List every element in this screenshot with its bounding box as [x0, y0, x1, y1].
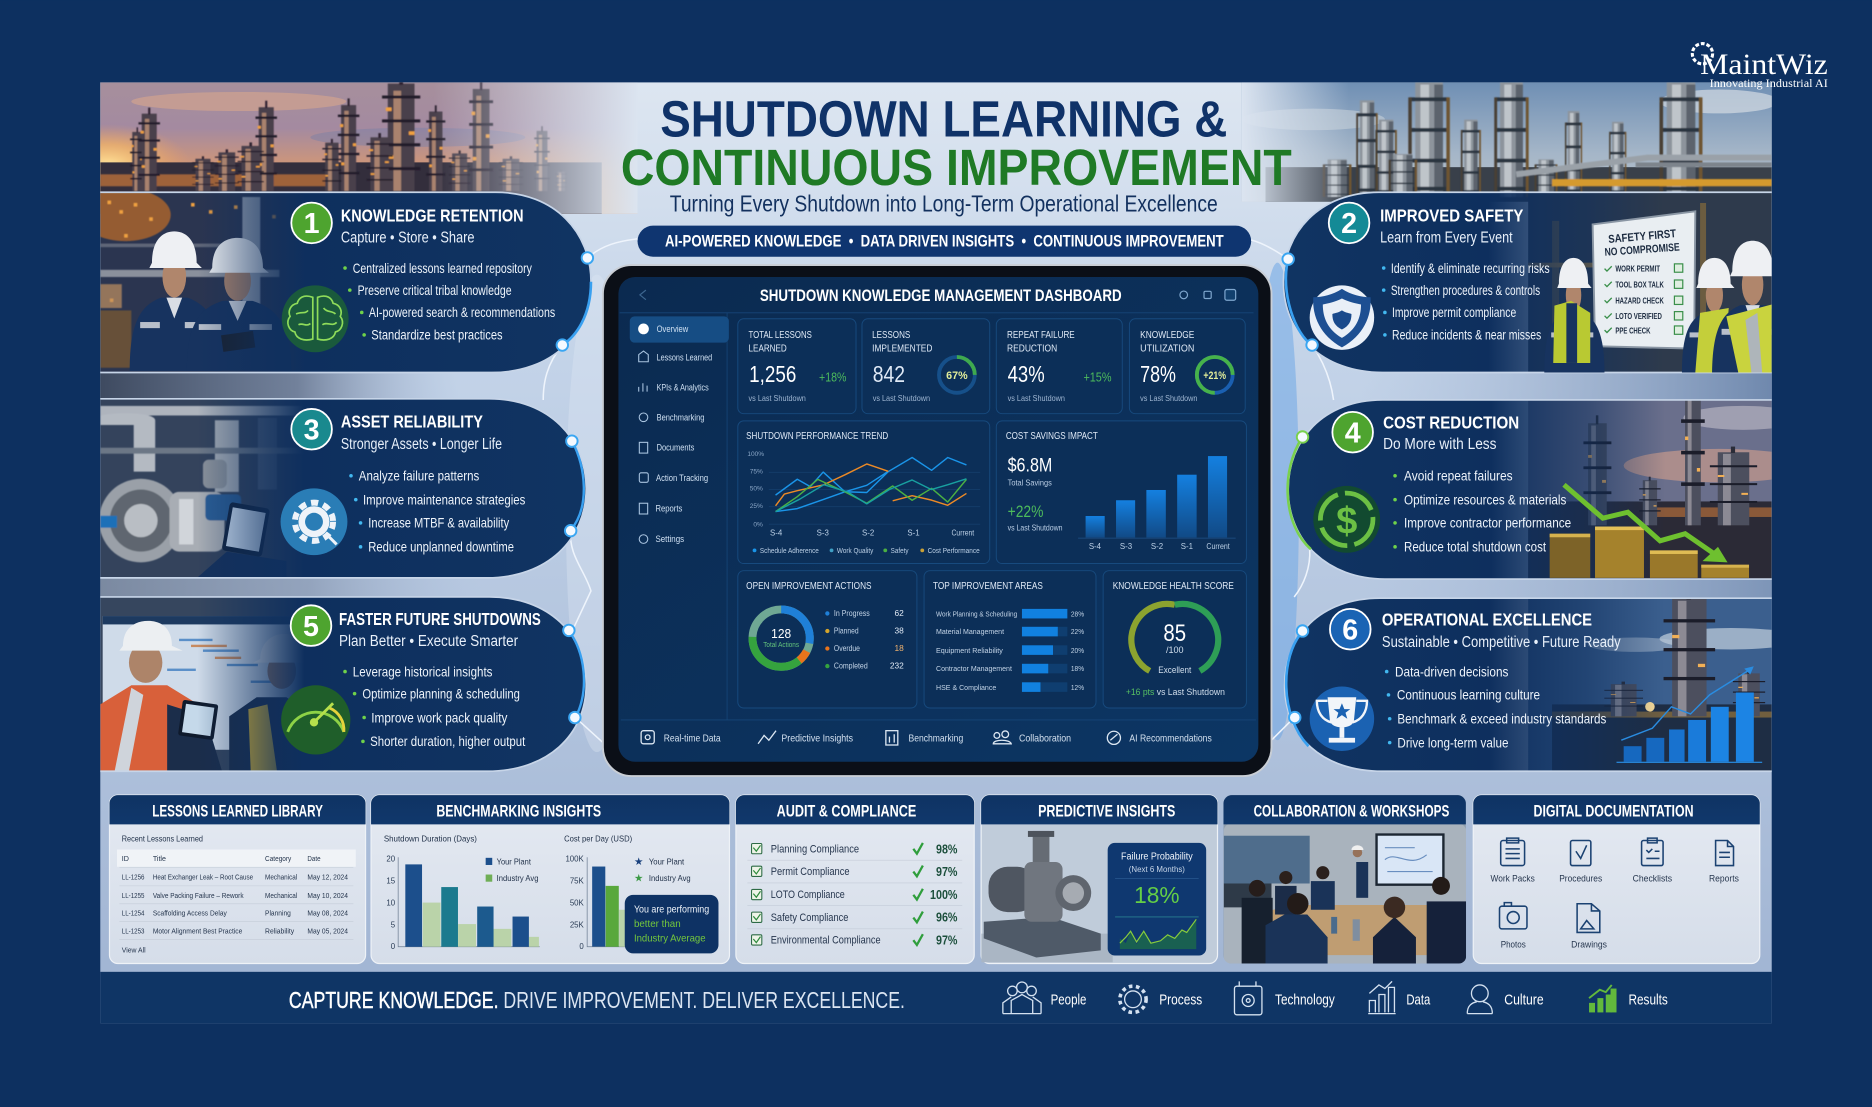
tagline pill: AI-POWERED KNOWLEDGE • DATA DRIVEN INSIGHTS • CONTINUOUS IMPROVEMENT	[665, 232, 1224, 251]
number badge 4	[1332, 412, 1373, 452]
cost chart: Industry Avg	[649, 873, 691, 883]
chart card: shutdown performance trend: Schedule Adherence	[760, 547, 819, 555]
KPI: lessons implemented: LESSONS	[872, 330, 911, 341]
dashboard footer strip: Collaboration	[1019, 733, 1071, 744]
KPI: repeat failure reduction: REPEAT FAILURE	[1007, 330, 1075, 341]
KPI: total lessons learned: vs Last Shutdown	[749, 394, 806, 403]
safety board: NO COMPROMISE	[1604, 242, 1680, 259]
footer icons	[1003, 981, 1492, 1015]
lessons table: Date	[307, 855, 321, 863]
card: top improvement areas	[924, 571, 1096, 708]
duration chart: 15	[386, 876, 396, 885]
heading: IMPROVED SAFETY	[1380, 205, 1523, 225]
KPI: lessons implemented: vs Last Shutdown	[873, 394, 930, 403]
KPI: lessons implemented: 842	[873, 361, 905, 387]
number badge 5	[291, 605, 331, 646]
card: knowledge health score: KNOWLEDGE HEALTH SCORE	[1113, 581, 1234, 592]
bullets: Improve permit compliance	[1392, 305, 1517, 320]
duration chart	[384, 834, 540, 951]
bullets: AI-powered search & recommendations	[369, 305, 555, 320]
card: predictive insights	[981, 795, 1218, 963]
card: open improvement actions: 18	[894, 643, 904, 653]
panel 3: asset reliability	[99, 399, 586, 578]
bullets: Standardize best practices	[371, 328, 503, 343]
chart card: shutdown performance trend: 75%	[750, 468, 763, 475]
chart card: shutdown performance trend: S-1	[907, 528, 920, 537]
chart card: shutdown performance trend: Work Quality	[837, 547, 874, 555]
card: digital documentation: DIGITAL DOCUMENTATION	[1534, 802, 1694, 821]
KPI: lessons implemented: IMPLEMENTED	[872, 344, 932, 355]
number badge 1: 1	[304, 208, 320, 240]
KPI: knowledge utilization: +21%	[1203, 370, 1226, 382]
compliance rows: 96%	[936, 911, 957, 925]
lessons table: LL-1254	[122, 910, 144, 918]
card: predictive insights: PREDICTIVE INSIGHTS	[1038, 802, 1175, 821]
lessons table: Category	[265, 855, 292, 863]
icon: dollar cycle: $	[1336, 500, 1357, 543]
number badge 2: 2	[1341, 208, 1357, 240]
heading: KNOWLEDGE RETENTION	[341, 205, 524, 225]
number badge 5: 5	[303, 611, 319, 643]
safety board: PPE CHECK	[1615, 325, 1651, 335]
chart card: shutdown performance trend: 100%	[747, 451, 764, 458]
subheading: Capture • Store • Share	[341, 228, 475, 246]
sidebar: Lessons Learned	[657, 353, 712, 363]
failure probability panel: (Next 6 Months)	[1129, 864, 1185, 874]
card: benchmarking insights: BENCHMARKING INSIGHTS	[436, 802, 601, 821]
chart card: cost savings impact	[996, 421, 1246, 564]
KPI: knowledge utilization: vs Last Shutdown	[1140, 394, 1197, 403]
compliance rows: Environmental Compliance	[771, 935, 881, 947]
icon: dollar cycle	[1313, 486, 1380, 553]
lessons table: View All	[122, 947, 146, 955]
duration chart: Your Plant	[497, 856, 532, 866]
bullets: Reduce unplanned downtime	[368, 540, 514, 555]
KPI: lessons implemented	[872, 330, 975, 403]
KPI: repeat failure reduction: vs Last Shutdown	[1008, 394, 1065, 403]
KPI cards	[738, 319, 1245, 414]
KPI: repeat failure reduction: 43%	[1008, 361, 1045, 387]
sidebar: Overview	[657, 324, 689, 334]
bullets: Reduce incidents & near misses	[1392, 328, 1541, 343]
KPI: knowledge utilization: UTILIZATION	[1140, 344, 1194, 355]
bullets: Drive long-term value	[1397, 735, 1509, 750]
card: digital documentation	[1473, 795, 1760, 963]
cost chart: 75K	[570, 876, 585, 885]
tagline pill	[638, 226, 1251, 257]
card: audit and compliance	[736, 795, 974, 963]
bullets: Improve contractor performance	[1404, 516, 1571, 531]
heading: ASSET RELIABILITY	[341, 411, 483, 431]
compliance rows: LOTO Compliance	[771, 889, 845, 901]
number badge 2	[1329, 203, 1369, 243]
bullets	[343, 261, 555, 343]
card: top improvement areas: 28%	[1071, 609, 1084, 618]
chart card: cost savings impact: Total Savings	[1008, 478, 1052, 487]
chart card: shutdown performance trend	[738, 421, 990, 564]
sidebar: Reports	[655, 504, 683, 514]
connector lines	[543, 239, 1334, 743]
chart card: cost savings impact: S-3	[1120, 542, 1133, 551]
document labels: Reports	[1709, 874, 1739, 884]
number badge 6	[1330, 609, 1371, 649]
card: top improvement areas: 22%	[1071, 627, 1084, 636]
KPI: total lessons learned: 1,256	[749, 361, 796, 387]
safety board: TOOL BOX TALK	[1615, 279, 1664, 289]
card: collaboration and workshops: COLLABORATION & WORKSHOPS	[1254, 802, 1449, 821]
document labels: Drawings	[1571, 939, 1607, 949]
KPI: repeat failure reduction: +15%	[1083, 370, 1112, 384]
sidebar: Documents	[657, 443, 695, 453]
header photo: daytime refinery right	[1242, 82, 1772, 202]
panel 1: knowledge retention	[80, 189, 591, 373]
header photo: sunset refinery left	[100, 82, 638, 214]
lessons table: Reliability	[265, 928, 295, 936]
heading: COST REDUCTION	[1383, 413, 1519, 433]
footer slogan: CAPTURE KNOWLEDGE. DRIVE IMPROVEMENT. DELIVER EXCELLENCE.	[289, 987, 905, 1013]
KPI: total lessons learned: TOTAL LESSONS	[749, 330, 812, 341]
lessons table: LL-1255	[122, 892, 144, 900]
chart card: shutdown performance trend: Current	[952, 528, 975, 537]
cost chart: 0	[579, 942, 584, 951]
results icon	[1589, 985, 1617, 1012]
cost chart: 100K	[565, 854, 585, 863]
duration chart: 0	[391, 942, 396, 951]
document labels: Procedures	[1559, 874, 1602, 884]
dashboard screen	[618, 277, 1258, 762]
chart card: shutdown performance trend: Cost Performance	[928, 547, 980, 555]
bullets: Optimize resources & materials	[1404, 492, 1566, 507]
card: open improvement actions	[738, 571, 917, 708]
sidebar: KPIs & Analytics	[657, 382, 709, 392]
safety board: LOTO VERIFIED	[1615, 311, 1662, 321]
title: SHUTDOWN LEARNING &	[660, 91, 1227, 148]
icon: speedometer	[281, 685, 350, 755]
duration chart: Industry Avg	[497, 873, 539, 883]
number badge 1	[291, 203, 332, 243]
dashboard footer strip	[641, 731, 1212, 745]
title	[621, 91, 1292, 196]
chart card: cost savings impact: Current	[1206, 542, 1230, 551]
bullets: Avoid repeat failures	[1404, 469, 1513, 484]
cost chart: ★	[634, 856, 644, 868]
lessons table: May 05, 2024	[307, 928, 348, 936]
main infographic canvas	[100, 82, 1772, 1023]
bullets: Benchmark & exceed industry standards	[1397, 712, 1606, 727]
lessons table: May 12, 2024	[307, 873, 348, 881]
number badge 6: 6	[1342, 614, 1358, 646]
bullets: Improve work pack quality	[371, 710, 508, 725]
card: knowledge health score: +16 pts vs Last Shutdown	[1126, 687, 1225, 697]
card: open improvement actions: Planned	[834, 626, 859, 636]
document labels: Checklists	[1633, 874, 1672, 884]
lessons table: Motor Alignment Best Practice	[153, 928, 242, 936]
compliance rows: 97%	[936, 933, 957, 947]
footer pillars: Results	[1628, 992, 1668, 1009]
chart card: shutdown performance trend: SHUTDOWN PERFORMANCE TREND	[746, 431, 888, 442]
document labels	[1491, 874, 1739, 949]
chart card: shutdown performance trend: 0%	[753, 522, 763, 529]
window controls	[640, 290, 1236, 300]
lessons table: Mechanical	[265, 873, 298, 881]
footer pillars: Culture	[1504, 992, 1544, 1009]
number badge 3: 3	[304, 414, 320, 446]
card: knowledge health score: /100	[1166, 645, 1184, 655]
failure probability panel: 18%	[1134, 882, 1180, 908]
safety board: HAZARD CHECK	[1615, 295, 1664, 305]
bar chart growth	[1617, 666, 1762, 763]
heading: FASTER FUTURE SHUTDOWNS	[339, 609, 541, 629]
bullets: Leverage historical insights	[353, 664, 493, 679]
bullets: Strengthen procedures & controls	[1391, 283, 1540, 298]
footer pillars: Technology	[1275, 992, 1335, 1009]
duration chart: 5	[391, 921, 396, 930]
dashboard footer strip: Benchmarking	[909, 733, 963, 744]
footer pillars	[1051, 992, 1668, 1009]
card: top improvement areas: 12%	[1071, 683, 1084, 692]
card: open improvement actions: 128	[771, 626, 791, 641]
bullets: Reduce total shutdown cost	[1404, 540, 1546, 555]
safety board: SAFETY FIRST	[1608, 228, 1677, 246]
dashboard footer strip: Predictive Insights	[781, 733, 853, 744]
callout: Industry Average	[634, 933, 706, 944]
KPI: knowledge utilization	[1140, 330, 1233, 403]
duration chart: Shutdown Duration (Days)	[384, 834, 477, 844]
number badge 3	[291, 409, 332, 450]
lessons table: Mechanical	[265, 892, 298, 900]
card: top improvement areas: 20%	[1071, 646, 1084, 655]
card: open improvement actions: Completed	[834, 661, 868, 671]
sidebar: Settings	[655, 534, 685, 544]
bullets: Data-driven decisions	[1395, 664, 1509, 679]
chart card: cost savings impact: COST SAVINGS IMPACT	[1006, 431, 1098, 442]
chart card: shutdown performance trend: 25%	[750, 503, 763, 510]
sidebar	[620, 313, 1256, 720]
lessons table: Scaffolding Access Delay	[153, 910, 227, 918]
chart card: cost savings impact: S-1	[1181, 542, 1193, 551]
panel 6: operational excellence	[1285, 589, 1803, 771]
KPI: knowledge utilization: KNOWLEDGE	[1140, 330, 1195, 341]
panel 2: improved safety	[1283, 192, 1796, 376]
bullets	[1382, 261, 1550, 343]
arrow: falling cost	[1564, 485, 1728, 562]
duration chart: 20	[386, 854, 396, 863]
footer pillars: People	[1051, 992, 1086, 1009]
cost chart: Cost per Day (USD)	[564, 834, 632, 844]
heading: OPERATIONAL EXCELLENCE	[1382, 610, 1592, 630]
compliance rows: Safety Compliance	[771, 912, 848, 924]
safety board: WORK PERMIT	[1615, 263, 1660, 273]
bullets: Increase MTBF & availability	[368, 516, 509, 531]
connector nodes	[557, 252, 1318, 723]
card: lessons learned library: Recent Lessons Learned	[122, 834, 203, 844]
icon: shield	[1310, 285, 1374, 350]
panel 5: faster future shutdowns	[100, 597, 586, 771]
KPI: total lessons learned: +18%	[819, 370, 846, 384]
lessons table: ID	[122, 855, 129, 863]
card: top improvement areas: 18%	[1071, 664, 1084, 673]
lessons table: May 10, 2024	[307, 892, 348, 900]
workshop photo	[1224, 824, 1466, 963]
bullets: Analyze failure patterns	[359, 469, 479, 484]
card: lessons learned library	[109, 795, 366, 963]
card: open improvement actions: In Progress	[834, 608, 870, 618]
card: knowledge health score: 85	[1163, 620, 1186, 647]
cost chart: 25K	[570, 921, 585, 930]
lessons table	[122, 855, 348, 955]
card: top improvement areas: Work Planning & Scheduling	[936, 609, 1017, 618]
bullets: Optimize planning & scheduling	[362, 686, 520, 701]
chart card: shutdown performance trend: S-2	[862, 528, 874, 537]
bullets: Centralized lessons learned repository	[353, 261, 532, 276]
coin stacks	[1550, 527, 1749, 578]
bullets	[349, 469, 525, 555]
card: open improvement actions: Total Actions	[763, 641, 799, 649]
sidebar: Benchmarking	[657, 412, 704, 422]
KPI: total lessons learned	[749, 330, 846, 403]
chart card: shutdown performance trend: Safety	[891, 547, 909, 555]
chart card: cost savings impact: +22%	[1008, 502, 1044, 521]
cost chart	[564, 834, 691, 951]
card: open improvement actions: 38	[894, 626, 904, 636]
card: top improvement areas: HSE & Compliance	[936, 683, 996, 692]
compliance rows: Planning Compliance	[771, 843, 859, 855]
failure probability panel: Failure Probability	[1121, 852, 1193, 863]
cost chart: ★	[634, 873, 644, 885]
card: open improvement actions: Overdue	[834, 643, 860, 653]
card: top improvement areas: Equipment Reliability	[936, 646, 1003, 655]
duration chart: 10	[386, 899, 396, 908]
subheading: Learn from Every Event	[1380, 228, 1513, 246]
bullets	[343, 664, 525, 749]
logo: MaintWiz: Innovating Industrial AI	[1710, 78, 1828, 90]
icon: gear	[281, 488, 347, 555]
subheading: Sustainable • Competitive • Future Ready	[1382, 633, 1621, 651]
title: CONTINUOUS IMPROVEMENT	[621, 139, 1292, 196]
pump photo	[981, 831, 1113, 962]
safety workers	[1544, 240, 1772, 372]
compliance rows: 100%	[930, 888, 957, 902]
logo: MaintWiz	[1692, 44, 1828, 90]
dashboard footer strip: AI Recommendations	[1129, 733, 1212, 744]
lessons table: Title	[153, 855, 166, 863]
cost chart: Your Plant	[649, 856, 685, 866]
lessons table: May 08, 2024	[307, 910, 348, 918]
footer pillars: Data	[1406, 992, 1431, 1009]
safety board	[1593, 211, 1695, 349]
bullets: Identify & eliminate recurring risks	[1391, 261, 1550, 276]
callout: better than	[634, 919, 681, 930]
panel 4: cost reduction	[1286, 399, 1772, 580]
compliance rows: 97%	[936, 865, 957, 879]
subheading: Stronger Assets • Longer Life	[341, 435, 502, 453]
failure probability panel	[1108, 843, 1206, 955]
number badge 4: 4	[1345, 417, 1361, 449]
document icons	[1500, 838, 1734, 932]
lessons table: Planning	[265, 910, 291, 918]
bullets: Continuous learning culture	[1397, 688, 1540, 703]
chart card: shutdown performance trend: 50%	[750, 486, 763, 493]
icon: trophy	[1310, 686, 1374, 751]
subtitle: Turning Every Shutdown into Long-Term Operational Excellence	[670, 190, 1218, 216]
document labels: Photos	[1501, 939, 1526, 949]
callout: You are performing	[634, 905, 709, 916]
callout	[625, 895, 718, 953]
bullets	[1385, 664, 1606, 750]
card: knowledge health score	[1103, 571, 1246, 708]
chart card: cost savings impact: $6.8M	[1008, 456, 1052, 477]
bullets: Preserve critical tribal knowledge	[358, 283, 512, 298]
dashboard footer strip: Real-time Data	[664, 733, 721, 744]
footer pillars: Process	[1159, 992, 1202, 1009]
logo: MaintWiz: MaintWiz	[1700, 48, 1828, 81]
soft glows behind tablet and band between side panels	[100, 263, 1772, 752]
chart card: cost savings impact: S-2	[1151, 542, 1163, 551]
card: benchmarking insights	[371, 795, 729, 963]
chart card: cost savings impact: S-4	[1089, 542, 1102, 551]
lessons table: Valve Packing Failure – Rework	[153, 892, 244, 900]
KPI: total lessons learned: LEARNED	[749, 344, 787, 355]
chart card: shutdown performance trend: S-3	[817, 528, 829, 537]
lessons table: LL-1256	[122, 873, 144, 881]
bullets: Shorter duration, higher output	[370, 734, 525, 749]
lessons table: Heat Exchanger Leak – Root Cause	[153, 873, 253, 881]
card: collaboration and workshops	[1223, 795, 1466, 963]
card: lessons learned library: LESSONS LEARNED LIBRARY	[152, 802, 323, 821]
compliance rows: 98%	[936, 842, 957, 856]
KPI: knowledge utilization: 78%	[1140, 361, 1176, 387]
footer band	[100, 972, 1772, 1023]
compliance rows	[747, 842, 962, 947]
dashboard title: SHUTDOWN KNOWLEDGE MANAGEMENT DASHBOARD	[760, 286, 1122, 305]
card: top improvement areas: TOP IMPROVEMENT AREAS	[933, 581, 1043, 592]
bullets	[1393, 469, 1571, 555]
chart card: cost savings impact: vs Last Shutdown	[1008, 524, 1063, 533]
icon: brain	[282, 285, 349, 352]
subheading: Do More with Less	[1383, 435, 1497, 453]
cost chart: 50K	[570, 899, 585, 908]
KPI: repeat failure reduction: REDUCTION	[1007, 344, 1057, 355]
card: open improvement actions: 62	[894, 608, 904, 618]
KPI: repeat failure reduction	[1007, 330, 1112, 403]
card: audit and compliance: AUDIT & COMPLIANCE	[777, 802, 916, 821]
card: open improvement actions: 232	[890, 661, 904, 671]
compliance rows: Permit Compliance	[771, 866, 850, 878]
card: knowledge health score: Excellent	[1158, 665, 1192, 675]
card: top improvement areas: Material Management	[936, 627, 1005, 636]
card: top improvement areas: Contractor Management	[936, 664, 1013, 673]
KPI: lessons implemented: 67%	[946, 370, 968, 382]
document labels: Work Packs	[1491, 874, 1535, 884]
subheading: Plan Better • Execute Smarter	[339, 632, 519, 650]
bullets: Improve maintenance strategies	[363, 492, 525, 507]
tablet dashboard	[603, 265, 1271, 776]
lessons table: LL-1253	[122, 928, 144, 936]
chart card: shutdown performance trend: S-4	[770, 528, 783, 537]
sidebar: Action Tracking	[656, 473, 708, 483]
card: open improvement actions: OPEN IMPROVEMENT ACTIONS	[746, 581, 872, 592]
